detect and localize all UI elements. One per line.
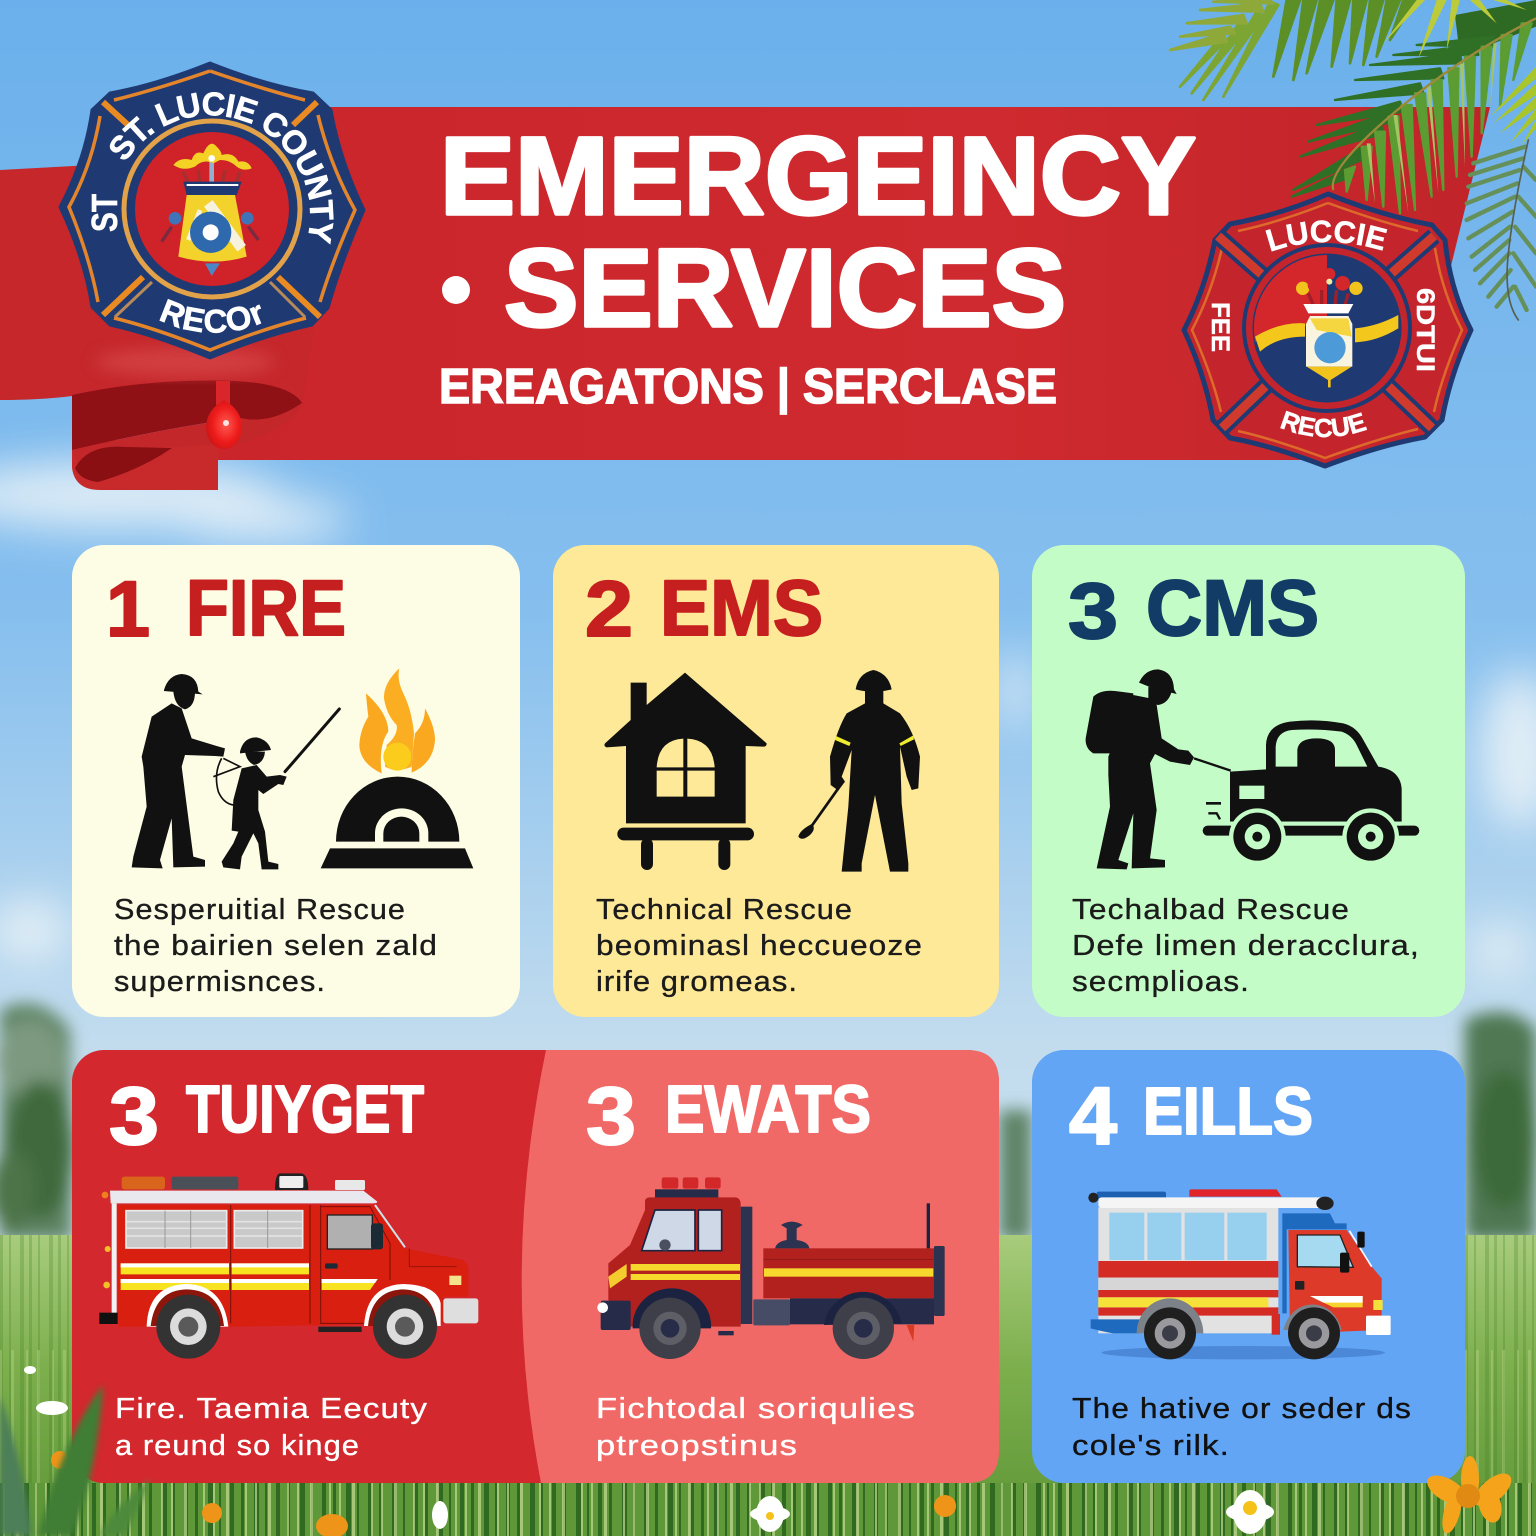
left badge ring text — [84, 92, 334, 334]
heading: 1 fire — [106, 563, 346, 653]
frond: center — [1292, 0, 1536, 213]
title: EMERGEINCY — [440, 115, 1196, 238]
left badge — [58, 62, 366, 360]
left ribbon tail — [0, 164, 320, 410]
vehicle: rescue truck — [99, 1173, 478, 1359]
text: ems description: beominasl heccueoze — [596, 930, 923, 962]
text: cms description: secmplioas. — [1072, 966, 1250, 998]
text: ewats description: ptreopstinus — [596, 1430, 798, 1462]
text: fire description: Sesperuitial Rescue — [114, 894, 406, 926]
meadow flowers — [24, 1366, 1274, 1536]
heading: 3 cms — [1068, 563, 1319, 655]
icon: dome — [321, 777, 473, 868]
heading: 4 eills: 4 — [1069, 1071, 1117, 1162]
text: tuiyget description — [115, 1393, 428, 1462]
clouds — [0, 461, 1536, 975]
text: eills description: cole's rilk. — [1072, 1430, 1230, 1462]
heading: 4 eills — [1069, 1071, 1313, 1162]
orange flower — [1422, 1456, 1517, 1535]
text: tuiyget description: a reund so kinge — [115, 1430, 360, 1462]
text: tuiyget description: Fire. Taemia Eecuty — [115, 1393, 428, 1425]
heading: 2 ems — [585, 563, 823, 653]
panel: 1 fire — [72, 545, 520, 1017]
heading: 3 tuiyget — [109, 1071, 424, 1162]
icon: firefighter with tool — [798, 670, 920, 872]
right badge ring text: LUCCIE — [1266, 220, 1388, 252]
text: ems description — [596, 894, 923, 998]
right badge — [1182, 192, 1474, 468]
text: eills description — [1072, 1393, 1412, 1462]
heading: 3 tuiyget: TUIYGET — [186, 1072, 424, 1147]
text: eills description: The hative or seder ds — [1072, 1393, 1412, 1425]
text: fire description — [114, 894, 438, 998]
crest — [1255, 268, 1398, 387]
heading: 1 fire: FIRE — [186, 563, 346, 652]
heading: 3 cms: CMS — [1146, 563, 1319, 652]
text: fire description: the bairien selen zald — [114, 930, 438, 962]
ribbon lower shadow — [75, 447, 172, 482]
heading: 4 eills: EILLS — [1143, 1074, 1313, 1149]
text: ems description: Technical Rescue — [596, 894, 853, 926]
meadow grass — [0, 1235, 1536, 1536]
hanging red drop — [206, 381, 242, 449]
right badge ring text: RECUE — [1280, 410, 1367, 438]
icon: firefighter and child — [132, 674, 339, 869]
main banner body — [218, 107, 1490, 460]
heading: 3 ewats — [586, 1071, 871, 1162]
heading: 3 ewats: EWATS — [665, 1072, 871, 1147]
right badge ring text — [1206, 220, 1439, 438]
ribbon lower stub — [72, 395, 218, 490]
title bullet — [442, 276, 470, 304]
banner ribbon — [0, 107, 1490, 490]
heading: 2 ems: 2 — [585, 564, 633, 653]
tree line — [0, 1003, 1536, 1240]
vehicle: pumper truck — [597, 1177, 945, 1359]
title — [440, 115, 1196, 350]
text: ewats description — [596, 1393, 916, 1462]
left badge ring text: ST. LUCIE COUNTY — [110, 92, 334, 245]
palm fronds — [1170, 0, 1536, 320]
right badge ring text: 6DTUI — [1411, 288, 1439, 372]
icon: utility vehicle — [1203, 720, 1419, 865]
right badge ring text: FEE — [1206, 302, 1234, 352]
text: ems description: irife gromeas. — [596, 966, 798, 998]
text: ewats description: Fichtodal soriqulies — [596, 1393, 916, 1425]
text: cms description: Techalbad Rescue — [1072, 894, 1350, 926]
text: cms description: Defe limen deracclura, — [1072, 930, 1420, 962]
icon: flame — [359, 668, 435, 773]
heading: 1 fire: 1 — [106, 564, 150, 653]
text: cms description — [1072, 894, 1420, 998]
heading: 3 tuiyget: 3 — [109, 1071, 159, 1162]
left badge ring text: RECOr — [159, 298, 262, 334]
panel: 3 cms — [1032, 545, 1465, 1017]
subtitle: EREAGATONS | SERCLASE — [439, 360, 1057, 414]
heading: 2 ems: EMS — [660, 563, 823, 652]
panel: 4 eills — [1032, 1050, 1465, 1483]
title: SERVICES — [504, 227, 1066, 350]
icon: firefighter with hose — [1086, 669, 1231, 869]
foreground leaves — [0, 1385, 150, 1536]
heading: 3 ewats: 3 — [586, 1071, 636, 1162]
icon: house — [604, 673, 767, 870]
ribbon curl edge — [72, 403, 302, 470]
vehicle: ambulance — [1088, 1189, 1391, 1359]
left badge ring text: ST — [84, 194, 125, 232]
frond: right — [1467, 140, 1536, 320]
panel: 3 tuiyget and 3 ewats — [72, 1050, 999, 1483]
crest — [162, 144, 258, 276]
heading: 3 cms: 3 — [1068, 566, 1118, 655]
panel: 2 ems — [553, 545, 999, 1017]
frond: yellow-green — [1383, 0, 1536, 145]
ribbon inner shadow — [72, 381, 302, 450]
frond: top — [1170, 0, 1417, 100]
text: fire description: supermisnces. — [114, 966, 326, 998]
